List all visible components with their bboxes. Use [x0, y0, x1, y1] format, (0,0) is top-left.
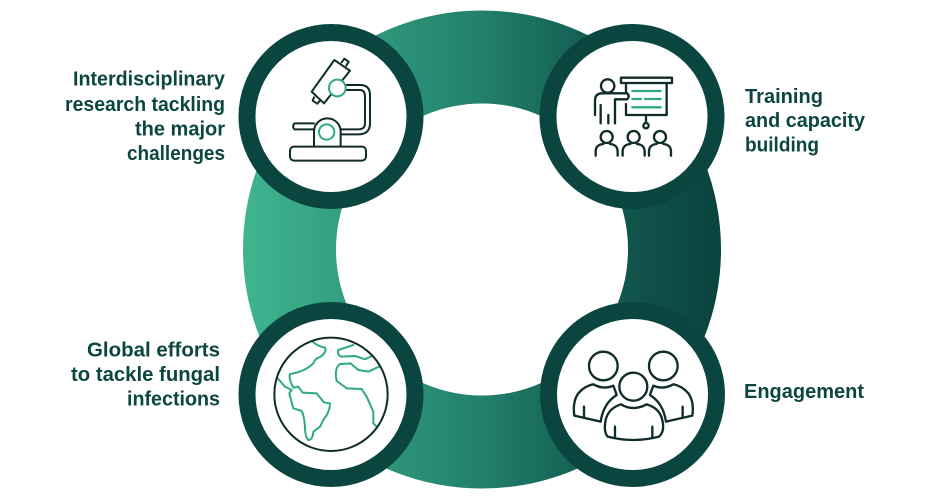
label: interdisciplinary research: the major [135, 118, 225, 140]
label: interdisciplinary research: challenges [127, 143, 225, 165]
label: training: and capacity [745, 110, 866, 132]
icon: presenter and audience [595, 78, 672, 156]
label: global efforts [71, 340, 220, 410]
node: globe [247, 310, 415, 478]
label: global efforts: to tackle fungal [71, 364, 220, 386]
label: training [745, 86, 866, 156]
label: global efforts: infections [127, 388, 220, 410]
gradient ring [290, 57, 674, 442]
label: interdisciplinary research: Interdisciplinary [73, 68, 226, 90]
node ring: people [548, 310, 716, 478]
label: interdisciplinary research: research tackling [65, 94, 225, 116]
icon: group of people [574, 352, 693, 440]
node ring: presenter [548, 32, 716, 200]
icon: microscope [290, 59, 370, 161]
node: microscope [247, 32, 415, 200]
label: global efforts: Global efforts [87, 340, 220, 362]
label: interdisciplinary research [65, 68, 226, 165]
label: engagement: Engagement [744, 381, 864, 403]
node: people [548, 310, 716, 478]
node ring: globe [247, 310, 415, 478]
icon: globe [274, 338, 388, 451]
node ring: microscope [247, 32, 415, 200]
label: training: building [745, 134, 819, 156]
label: training: Training [745, 86, 823, 108]
node: presenter [548, 32, 716, 200]
